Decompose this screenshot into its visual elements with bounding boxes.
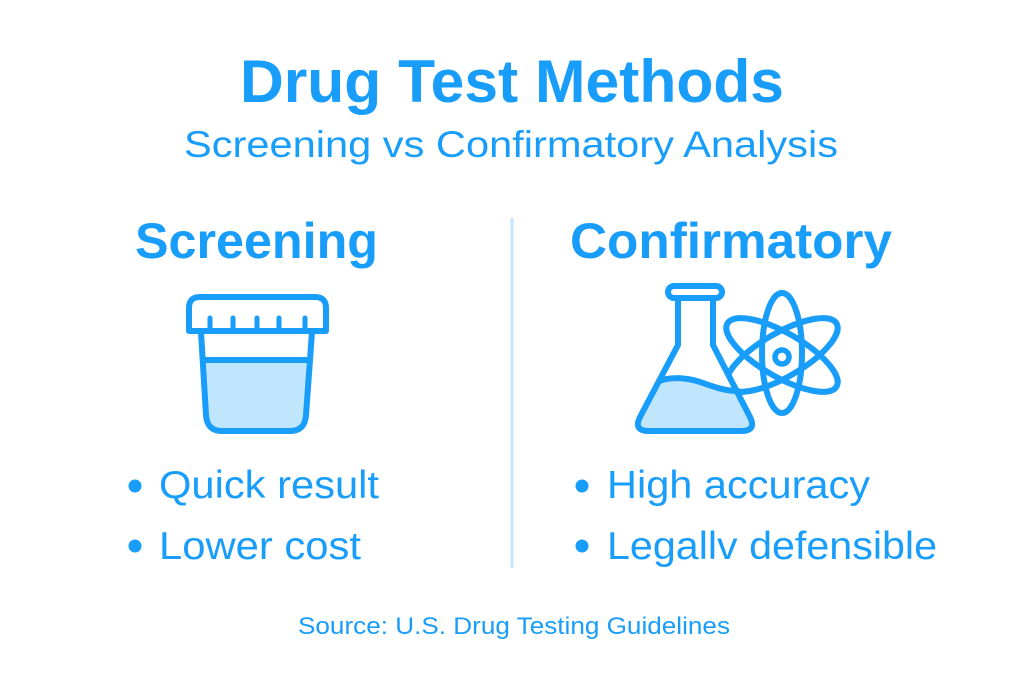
bullet: lower cost: Lower cost	[159, 525, 361, 568]
icon: specimen cup	[189, 297, 326, 431]
bullet list: confirmatory	[576, 464, 937, 568]
atom	[716, 293, 848, 413]
icon: flask and atom	[638, 286, 848, 431]
bullet: quick result: Quick result	[159, 464, 379, 507]
subtitle: Screening vs Confirmatory Analysis	[184, 124, 838, 165]
center divider	[510, 218, 514, 568]
source: Source: U.S. Drug Testing Guidelines	[298, 613, 730, 640]
bullet: high accuracy: High accuracy	[607, 464, 871, 507]
bullet list: screening	[128, 464, 379, 568]
heading: confirmatory: Confirmatory	[570, 213, 892, 269]
flask	[638, 286, 752, 431]
bullet: legally defensible: Legallv defensible	[607, 525, 937, 568]
heading: screening: Screening	[135, 213, 378, 269]
title: Drug Test Methods	[240, 48, 784, 115]
